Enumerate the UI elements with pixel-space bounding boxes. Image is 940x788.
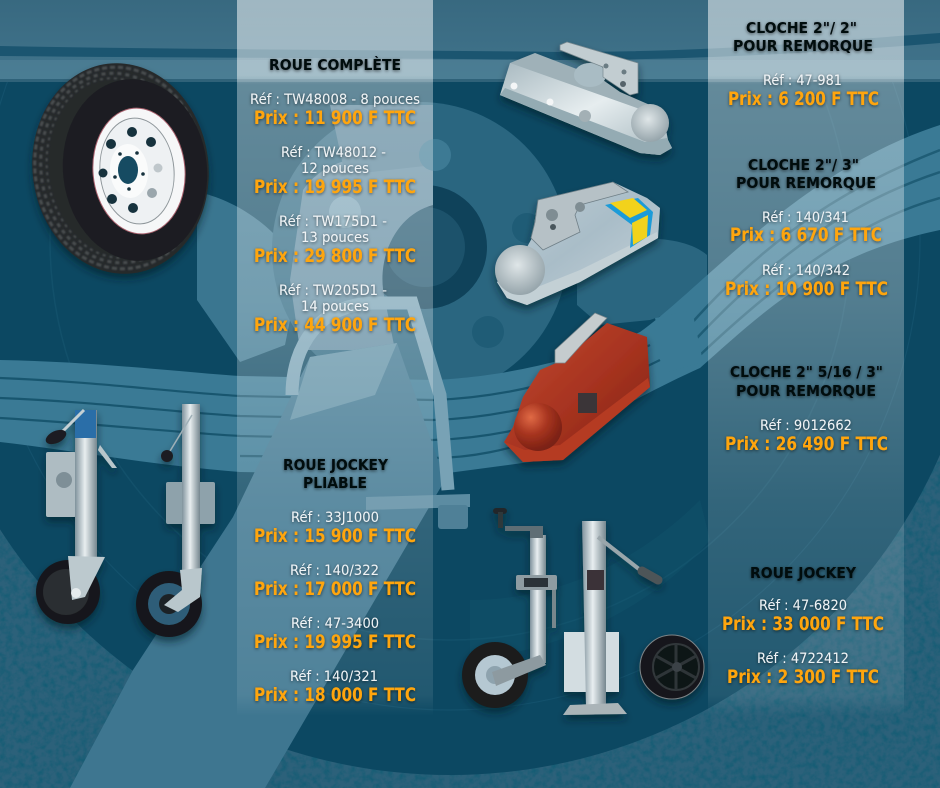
leaf spring xyxy=(0,125,940,475)
price: 9012662: Prix : 26 490 F TTC xyxy=(725,433,888,455)
icon: square tube jack xyxy=(563,521,658,715)
heading: cloche 2 5/16 / 3: CLOCHE 2" 5/16 / 3" xyxy=(730,363,883,381)
price: 47-3400: Réf : 47-3400 xyxy=(291,616,379,632)
price: 14 pouces: Réf : TW205D1 - xyxy=(279,283,387,299)
icon: jockey wheel with crank handle xyxy=(462,508,557,708)
heading: cloche 2 / 2: CLOCHE 2"/ 2" xyxy=(746,19,857,37)
price: 140/321: Prix : 18 000 F TTC xyxy=(254,684,416,706)
axle beam xyxy=(70,343,445,788)
price: 13 pouces: Réf : TW175D1 - xyxy=(279,214,387,230)
price: 33J1000: Réf : 33J1000 xyxy=(291,510,379,526)
price: 140/342 xyxy=(725,263,888,300)
U-bolt xyxy=(292,303,448,490)
price: 12 pouces: Prix : 19 995 F TTC xyxy=(254,176,416,198)
price: 140/322: Prix : 17 000 F TTC xyxy=(254,578,416,600)
price: 14 pouces xyxy=(254,283,416,336)
heading: cloche 2 / 3: POUR REMORQUE xyxy=(736,174,876,192)
tyre lugs xyxy=(197,192,300,362)
price: 14 pouces: Prix : 44 900 F TTC xyxy=(254,314,416,336)
price: 140/341: Prix : 6 670 F TTC xyxy=(730,224,882,246)
price: 13 pouces: Prix : 29 800 F TTC xyxy=(254,245,416,267)
price: 140/322: Réf : 140/322 xyxy=(290,563,379,579)
price: 14 pouces: 14 pouces xyxy=(301,299,369,315)
price: 47-6820 xyxy=(722,598,884,635)
price: 140/342: Réf : 140/342 xyxy=(762,263,850,279)
price: 140/342: Prix : 10 900 F TTC xyxy=(725,278,888,300)
price: 8 pouces xyxy=(250,92,420,129)
price: 47-3400 xyxy=(254,616,416,653)
heading: roue jockey pliable xyxy=(283,456,389,492)
price: 13 pouces xyxy=(254,214,416,267)
hub disc xyxy=(272,102,568,398)
heading: roue jockey: ROUE JOCKEY xyxy=(750,564,857,582)
icon: folding jockey wheel, plain tube xyxy=(136,404,215,637)
price: 47-6820: Réf : 47-6820 xyxy=(759,598,847,614)
price: 47-981 xyxy=(728,73,879,110)
price: 140/322 xyxy=(254,563,416,600)
icon: galvanized coupler 2 by 3 with yellow label xyxy=(495,182,660,305)
price: 47-981: Réf : 47-981 xyxy=(763,73,842,89)
price: 9012662 xyxy=(725,418,888,455)
price: 140/341 xyxy=(730,210,882,246)
heading: roue complète: ROUE COMPLÈTE xyxy=(269,55,401,74)
price: 140/321: Réf : 140/321 xyxy=(290,669,378,685)
price: 4722412 xyxy=(727,651,879,688)
panel: left translucent column xyxy=(237,0,433,716)
icon: folding jockey wheel, blue label xyxy=(36,410,117,624)
price: 13 pouces: 13 pouces xyxy=(301,230,369,246)
icon: red coupler 2 5/16 by 3 xyxy=(504,313,650,462)
price: 12 pouces xyxy=(254,145,416,198)
icon: galvanized coupler 2 by 2 xyxy=(500,42,672,155)
text block: cloches xyxy=(725,19,888,455)
icon: complete wheel with white spoked rim xyxy=(20,53,221,284)
heading: roue jockey pliable: ROUE JOCKEY xyxy=(283,456,389,474)
price: 47-981: Prix : 6 200 F TTC xyxy=(728,88,879,110)
text block: roue jockey xyxy=(722,564,884,688)
price: 33J1000: Prix : 15 900 F TTC xyxy=(254,525,416,547)
price: 9012662: Réf : 9012662 xyxy=(760,418,852,434)
heading: cloche 2 5/16 / 3: POUR REMORQUE xyxy=(736,382,876,400)
heading: cloche 2 5/16 / 3 xyxy=(730,363,883,400)
price: 47-6820: Prix : 33 000 F TTC xyxy=(722,613,884,635)
heading: roue jockey pliable: PLIABLE xyxy=(303,474,367,492)
price: 8 pouces: Réf : TW48008 - 8 pouces xyxy=(250,92,420,108)
text block: roue complète xyxy=(250,55,420,336)
price: 47-3400: Prix : 19 995 F TTC xyxy=(254,631,416,653)
top bands xyxy=(0,0,940,82)
text block: roue jockey pliable xyxy=(254,456,416,706)
heading: cloche 2 / 2 xyxy=(733,19,873,55)
price: 4722412: Prix : 2 300 F TTC xyxy=(727,666,879,688)
panel: right translucent column xyxy=(708,0,904,716)
price: 4722412: Réf : 4722412 xyxy=(757,651,849,667)
price: 140/321 xyxy=(254,669,416,706)
price: 33J1000 xyxy=(254,510,416,547)
price: 8 pouces: Prix : 11 900 F TTC xyxy=(254,107,416,129)
heading: cloche 2 / 3 xyxy=(736,156,876,192)
icon: spare black jockey wheel xyxy=(640,635,704,699)
price: 140/341: Réf : 140/341 xyxy=(762,210,849,226)
price: 12 pouces: Réf : TW48012 - xyxy=(281,145,386,161)
price: 12 pouces: 12 pouces xyxy=(301,161,369,177)
heading: cloche 2 / 3: CLOCHE 2"/ 3" xyxy=(748,156,859,174)
heading: cloche 2 / 2: POUR REMORQUE xyxy=(733,37,873,55)
